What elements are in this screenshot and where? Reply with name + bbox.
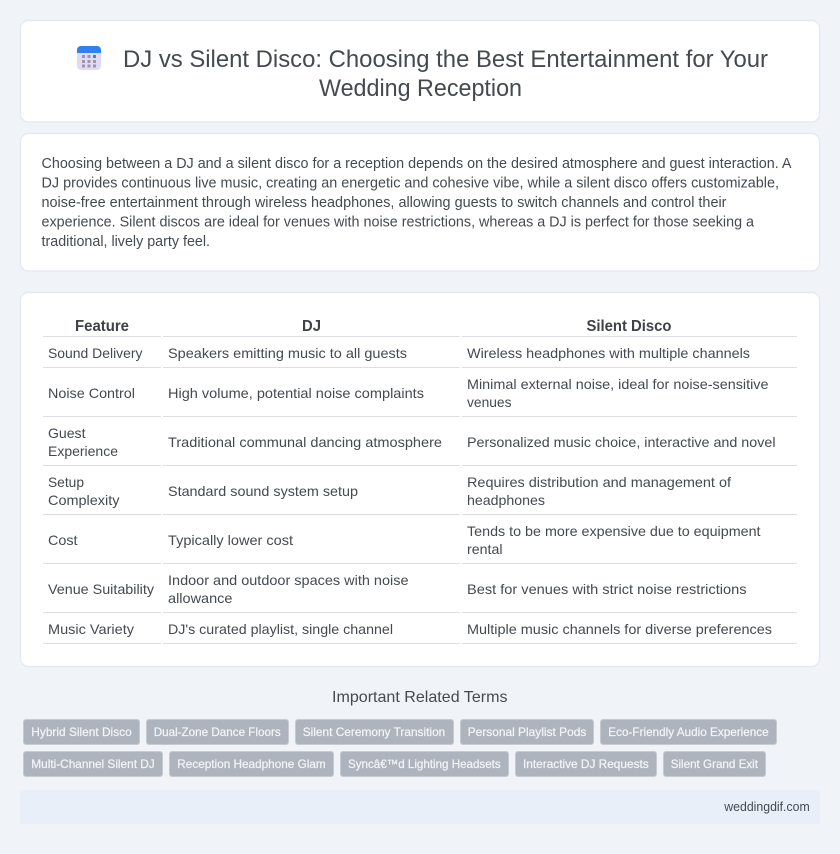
table header row: Silent Disco <box>586 318 672 335</box>
tag: personal playlist pods: Personal Playlist Pods <box>468 725 586 739</box>
tag: synced lighting headsets <box>340 752 508 776</box>
tag: multi-channel silent dj: Multi-Channel Silent DJ <box>31 757 155 771</box>
row: music variety: Multiple music channels for diverse preferences <box>467 621 772 637</box>
row: venue suitability: allowance <box>168 590 233 606</box>
tag: interactive dj requests: Interactive DJ Requests <box>523 757 649 771</box>
intro paragraph: experience. Silent discos are ideal for venues with noise restrictions, whereas a DJ is perfect for those seeking a <box>42 214 755 230</box>
row: setup complexity: Requires distribution and management of <box>467 474 731 490</box>
footer bar <box>20 790 820 824</box>
icon: calendar <box>77 46 101 70</box>
tag: interactive dj requests <box>516 752 656 776</box>
row: music variety: DJ's curated playlist, single channel <box>168 621 393 637</box>
title: DJ vs Silent Disco: Choosing the Best Entertainment for Your <box>123 46 768 73</box>
tag: eco-friendly audio experience: Eco-Friendly Audio Experience <box>608 725 769 739</box>
row: guest experience: Experience <box>48 443 118 459</box>
row: noise control: Noise Control <box>48 385 135 401</box>
intro paragraph: DJ provides continuous live music, creating an energetic and cohesive vibe, while a silent disco offers customizable, <box>42 174 779 192</box>
row: guest experience: Traditional communal dancing atmosphere <box>168 434 442 450</box>
title: Wedding Reception <box>319 75 522 102</box>
row: venue suitability: Venue Suitability <box>48 581 154 597</box>
panel: comparison table <box>20 292 820 666</box>
row: venue suitability <box>48 572 746 606</box>
row: cost: Tends to be more expensive due to equipment <box>467 523 761 539</box>
row: guest experience <box>48 425 776 459</box>
row: sound delivery: Sound Delivery <box>48 345 142 361</box>
row: setup complexity: Complexity <box>48 492 120 508</box>
panel: introduction text <box>20 134 820 271</box>
row: guest experience: Personalized music choice, interactive and novel <box>467 434 776 450</box>
row: venue suitability: Indoor and outdoor spaces with noise <box>168 572 409 588</box>
row: guest experience: Guest <box>48 425 86 441</box>
row: sound delivery <box>48 345 750 361</box>
row: music variety: Music Variety <box>48 621 134 637</box>
row: cost: Cost <box>48 532 78 548</box>
intro paragraph: noise-free entertainment through wireless headphones, allowing guests to switch channels and control their <box>42 194 726 211</box>
tag: silent grand exit: Silent Grand Exit <box>671 757 759 771</box>
row: cost: rental <box>467 541 502 557</box>
table header row: DJ <box>302 318 321 335</box>
tag: dual-zone dance floors: Dual-Zone Dance Floors <box>154 725 281 739</box>
row: noise control: venues <box>467 394 512 410</box>
tag: eco-friendly audio experience <box>600 720 776 744</box>
tag list <box>24 720 776 776</box>
footer source text: weddingdif.com <box>723 799 810 814</box>
heading: important related terms: Important Related Terms <box>332 689 508 706</box>
table header row: Feature <box>75 318 129 335</box>
row: setup complexity: Setup <box>48 474 84 490</box>
tag: silent grand exit <box>664 752 766 776</box>
title <box>123 46 768 102</box>
tag: synced lighting headsets: Syncâ€™d Lighting Headsets <box>348 757 501 771</box>
row: venue suitability: Best for venues with strict noise restrictions <box>467 581 746 597</box>
tag: dual-zone dance floors <box>146 720 288 744</box>
intro paragraph: Choosing between a DJ and a silent disco for a reception depends on the desired atmosphere and guest interaction. A <box>42 155 792 172</box>
row: noise control <box>48 376 769 410</box>
panel: header <box>20 20 820 122</box>
intro paragraph <box>42 155 792 250</box>
tag: silent ceremony transition <box>296 720 454 744</box>
row: noise control: High volume, potential noise complaints <box>168 385 424 401</box>
row: music variety <box>48 621 772 637</box>
row: sound delivery: Speakers emitting music to all guests <box>168 345 407 361</box>
tag: hybrid silent disco <box>24 720 140 744</box>
row: setup complexity <box>48 474 731 508</box>
tag: reception headphone glam: Reception Headphone Glam <box>177 757 326 771</box>
row: cost: Typically lower cost <box>168 532 293 548</box>
tag: silent ceremony transition: Silent Ceremony Transition <box>303 725 445 739</box>
tag: reception headphone glam <box>170 752 334 776</box>
tag: multi-channel silent dj <box>24 752 162 776</box>
intro paragraph: traditional, lively party feel. <box>42 233 210 250</box>
row: noise control: Minimal external noise, ideal for noise-sensitive <box>467 376 769 392</box>
row: sound delivery: Wireless headphones with multiple channels <box>467 345 750 361</box>
row: setup complexity: headphones <box>467 492 545 508</box>
tag: personal playlist pods <box>460 720 594 744</box>
row: setup complexity: Standard sound system setup <box>168 483 358 499</box>
row: cost <box>48 523 761 557</box>
tag: hybrid silent disco: Hybrid Silent Disco <box>31 725 132 739</box>
table header row <box>75 318 672 335</box>
